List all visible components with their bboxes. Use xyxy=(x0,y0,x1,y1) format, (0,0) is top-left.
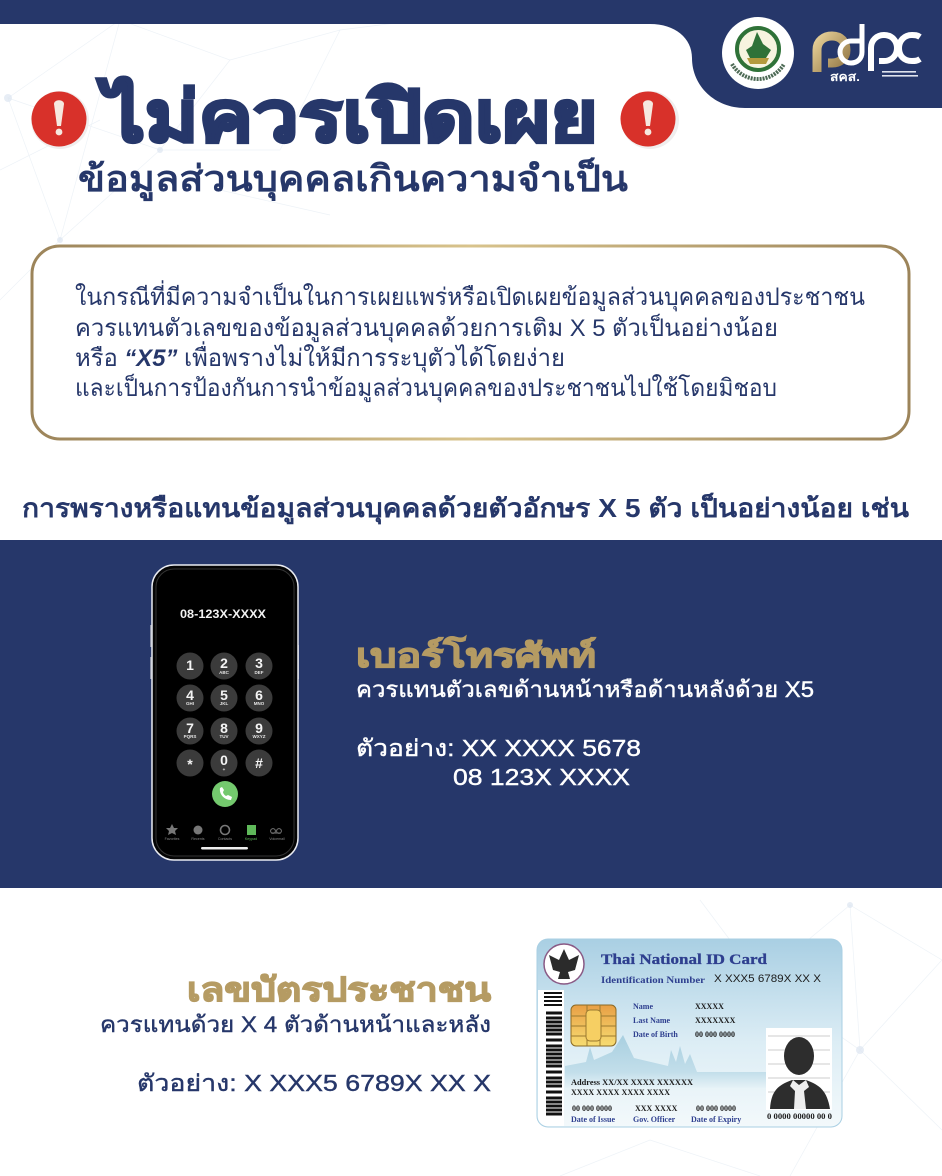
ID card illustration xyxy=(537,939,842,1127)
phone illustration: 2 xyxy=(220,655,228,671)
phone illustration: # xyxy=(255,755,263,771)
ID card illustration: Date of Birth xyxy=(633,1030,678,1039)
phone illustration: DEF xyxy=(254,670,264,675)
ID card illustration: Thai National ID Card xyxy=(601,952,768,968)
phone number text: ตัวอย่าง: XX XXXX 5678 xyxy=(356,735,641,761)
phone illustration: ABC xyxy=(219,670,230,675)
ID card illustration: Address XX/XX XXXX XXXXXX xyxy=(571,1078,693,1087)
phone number text: เบอร์โทรศัพท์ xyxy=(356,636,596,674)
ID card text: ควรแทนด้วย X 4 ตัวด้านหน้าและหลัง xyxy=(100,1012,491,1037)
phone illustration: 3 xyxy=(255,655,263,671)
ID card illustration: Identification Number xyxy=(601,976,706,986)
ID card illustration: 00 000 0000 xyxy=(572,1104,612,1113)
alert icon left xyxy=(31,91,89,149)
panel: explanation: และเป็นการป้องกันการนำข้อมูลส่วนบุคคลของประชาชนไปใช้โดยมิชอบ xyxy=(75,373,777,403)
phone illustration: 08-123X-XXXX xyxy=(180,609,266,621)
phone illustration: GHI xyxy=(186,701,194,706)
ID card text: ตัวอย่าง: X XXX5 6789X XX X xyxy=(137,1070,491,1096)
ID card illustration: 00 000 0000 xyxy=(695,1030,735,1039)
header band xyxy=(0,0,942,108)
main title: ไม่ควรเปิดเผย xyxy=(96,76,598,156)
PDPC logo xyxy=(817,24,920,84)
phone illustration: Recents xyxy=(191,837,205,841)
alert icon right xyxy=(620,91,679,149)
phone illustration: 7 xyxy=(186,720,194,736)
phone illustration: Favorites xyxy=(165,837,180,841)
phone number text: 08 123X XXXX xyxy=(453,764,630,790)
ID card illustration: XXXXX xyxy=(695,1002,724,1011)
ID card illustration: Date of Issue xyxy=(571,1115,615,1124)
phone illustration: TUV xyxy=(220,734,228,739)
ID card text xyxy=(100,971,492,1096)
phone illustration: 6 xyxy=(255,687,263,703)
phone illustration: 8 xyxy=(220,720,228,736)
ID card illustration: Gov. Officer xyxy=(633,1115,676,1124)
ID card illustration: XXXXXXX xyxy=(695,1016,736,1025)
phone number text xyxy=(356,636,814,790)
panel: explanation: หรือ “X5” เพื่อพรางไม่ให้มีการระบุตัวได้โดยง่าย xyxy=(75,341,565,373)
ID card illustration: XXXX XXXX XXXX XXXX xyxy=(571,1088,670,1097)
ID card illustration: Name xyxy=(633,1002,653,1011)
subtitle: ข้อมูลส่วนบุคคลเกินความจำเป็น xyxy=(78,156,628,202)
ID card text: เลขบัตรประชาชน xyxy=(187,971,492,1008)
phone illustration: WXYZ xyxy=(252,734,266,739)
PDPC logo: สคส. xyxy=(830,70,860,84)
phone number text: ควรแทนตัวเลขด้านหน้าหรือด้านหลังด้วย X5 xyxy=(356,677,814,702)
panel: explanation xyxy=(32,246,909,439)
phone illustration: 0 xyxy=(220,752,228,768)
ID card illustration: 00 000 0000 xyxy=(696,1104,736,1113)
ID card illustration: XXX XXXX xyxy=(635,1104,678,1113)
ID card illustration: 0 0000 00000 00 0 xyxy=(767,1112,832,1121)
phone illustration: 9 xyxy=(255,720,263,736)
phone illustration: 5 xyxy=(220,687,228,703)
ID card illustration: Date of Expiry xyxy=(691,1115,741,1124)
phone illustration: Voicemail xyxy=(269,837,285,841)
phone illustration: MNO xyxy=(254,701,265,706)
phone illustration xyxy=(150,565,299,860)
ID card illustration: Last Name xyxy=(633,1016,671,1025)
phone illustration: Keypad xyxy=(245,837,257,841)
phone illustration: 4 xyxy=(186,687,194,703)
phone illustration: * xyxy=(187,756,193,772)
phone illustration: 1 xyxy=(186,657,194,673)
panel: explanation: ควรแทนตัวเลขของข้อมูลส่วนบุคคลด้วยการเติม X 5 ตัวเป็นอย่างน้อย xyxy=(75,313,778,343)
phone illustration: Contacts xyxy=(218,837,232,841)
panel: explanation: ในกรณีที่มีความจำเป็นในการเผยแพร่หรือเปิดเผยข้อมูลส่วนบุคคลของประชาชน xyxy=(75,280,865,312)
section heading: การพรางหรือแทนข้อมูลส่วนบุคคลด้วยตัวอักษร X 5 ตัว เป็นอย่างน้อย เช่น xyxy=(22,492,909,525)
ministry seal logo xyxy=(722,17,794,89)
phone illustration: PQRS xyxy=(184,734,196,739)
phone illustration: + xyxy=(223,767,226,772)
ID card illustration: X XXX5 6789X XX X xyxy=(714,973,822,985)
phone illustration: JKL xyxy=(220,701,228,706)
panel: phone number band xyxy=(0,540,942,888)
